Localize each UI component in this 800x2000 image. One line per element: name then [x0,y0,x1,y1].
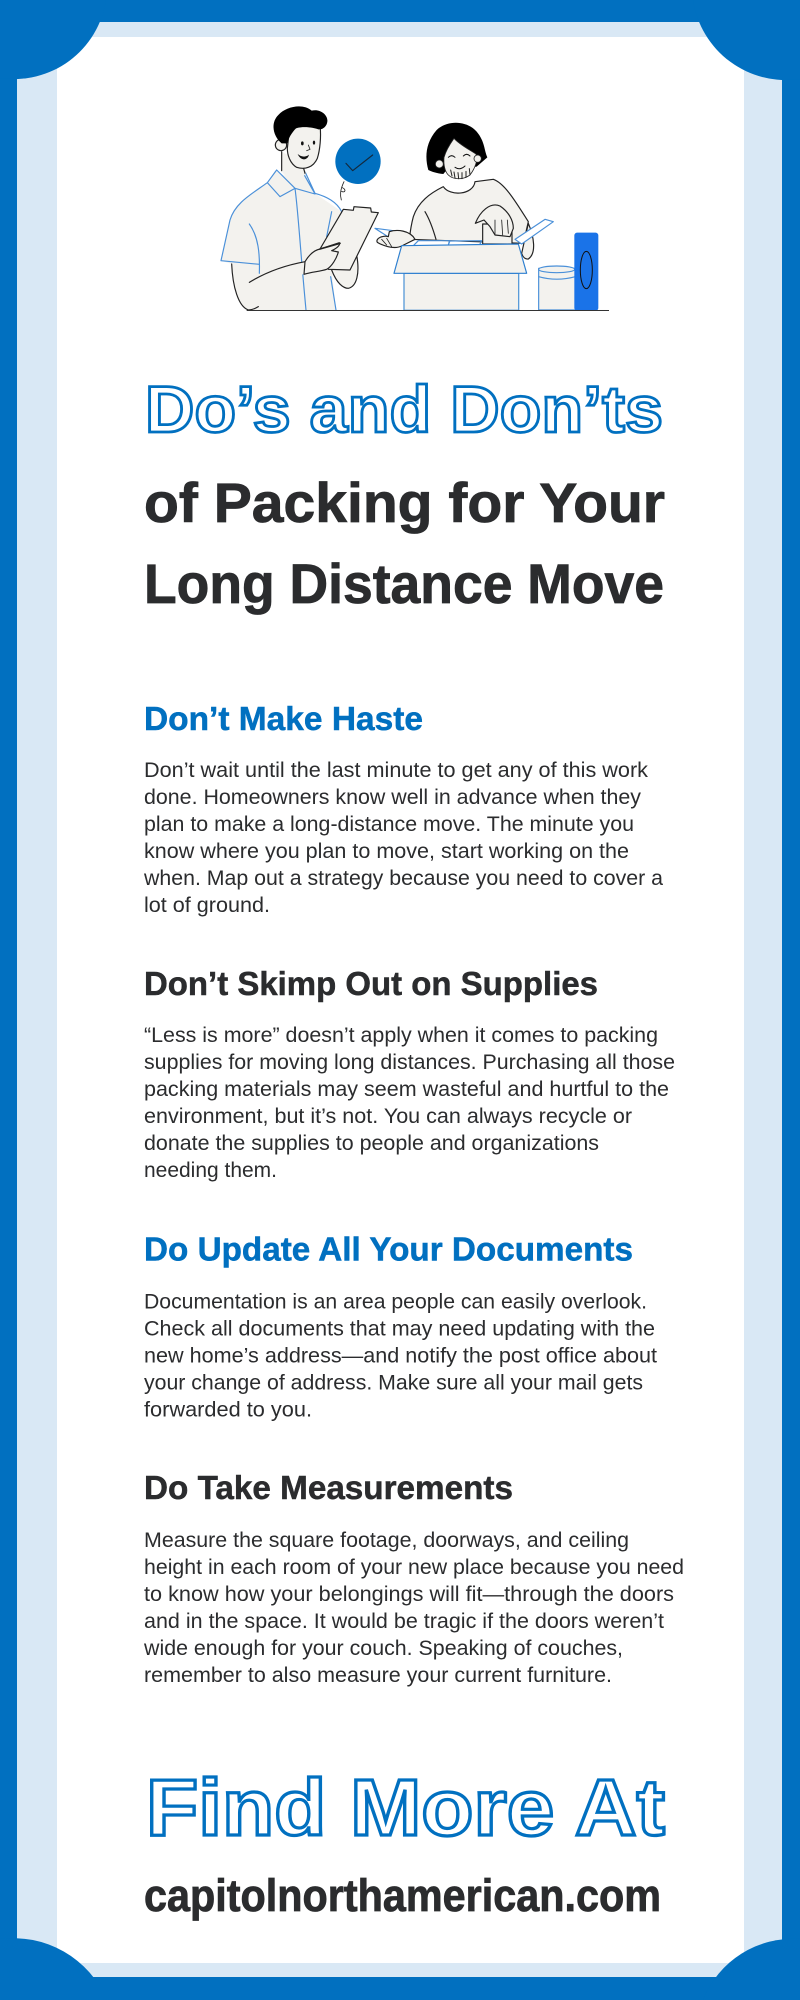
footer: website: capitolnorthamerican.com [144,1870,661,1921]
title: outlined line: Do’s and Don’ts [145,372,663,446]
moving box [375,219,553,310]
body text: know where you plan to move, start working on the [144,840,629,863]
section: Do Update All Your Documents [144,1232,657,1422]
body text: remember to also measure your current furniture. [144,1664,612,1687]
title: third line: Long Distance Move [144,552,664,615]
body text: to know how your belongings will fit—through the doors [144,1583,674,1606]
body text [144,1290,657,1422]
body text: lot of ground. [144,894,270,917]
icon: blue check badge [335,139,381,184]
section: Don't Make Haste [143,701,663,917]
floor line [247,309,609,312]
body text [144,1024,675,1182]
illustration: two people packing a moving box [221,106,609,311]
body text: donate the supplies to people and organizations [144,1132,599,1155]
body text: “Less is more” doesn’t apply when it comes to packing [144,1024,658,1047]
body text: packing materials may seem wasteful and hurtful to the [144,1078,669,1101]
body text: your change of address. Make sure all your mail gets [144,1372,643,1394]
body text: plan to make a long-distance move. The minute you [144,813,634,836]
heading: Don’t Make Haste [144,701,423,738]
section: Don't Skimp Out on Supplies [144,966,675,1182]
jar [539,266,576,310]
body text: and in the space. It would be tragic if the doors weren’t [144,1610,664,1633]
body text: when. Map out a strategy because you need to cover a [143,867,663,890]
man with clipboard [221,106,378,310]
body text: Measure the square footage, doorways, and ceiling [144,1529,629,1552]
body text: Don’t wait until the last minute to get any of this work [144,759,649,782]
title: second line: of Packing for Your [144,471,665,534]
heading: Do Update All Your Documents [144,1232,633,1268]
body text: new home’s address—and notify the post office about [144,1344,657,1368]
blue bottle [574,233,598,311]
title [144,372,665,615]
body text: Documentation is an area people can easily overlook. [144,1290,647,1314]
heading: Don’t Skimp Out on Supplies [144,966,598,1003]
footer call to action [144,1763,665,1921]
body text: wide enough for your couch. Speaking of couches, [143,1637,623,1660]
body text: needing them. [144,1159,277,1182]
body text: supplies for moving long distances. Purchasing all those [144,1051,675,1074]
body text [143,759,663,917]
body text: height in each room of your new place because you need [144,1556,684,1579]
body text: Check all documents that may need updating with the [144,1318,655,1340]
body text: environment, but it’s not. You can always recycle or [144,1105,632,1128]
body text [143,1529,684,1687]
footer: outlined heading: Find More At [146,1763,665,1852]
person with beard packing [409,123,534,259]
body text: forwarded to you. [144,1398,312,1422]
section: Do Take Measurements [143,1470,684,1687]
body text: done. Homeowners know well in advance when they [144,786,641,809]
heading: Do Take Measurements [144,1470,513,1507]
